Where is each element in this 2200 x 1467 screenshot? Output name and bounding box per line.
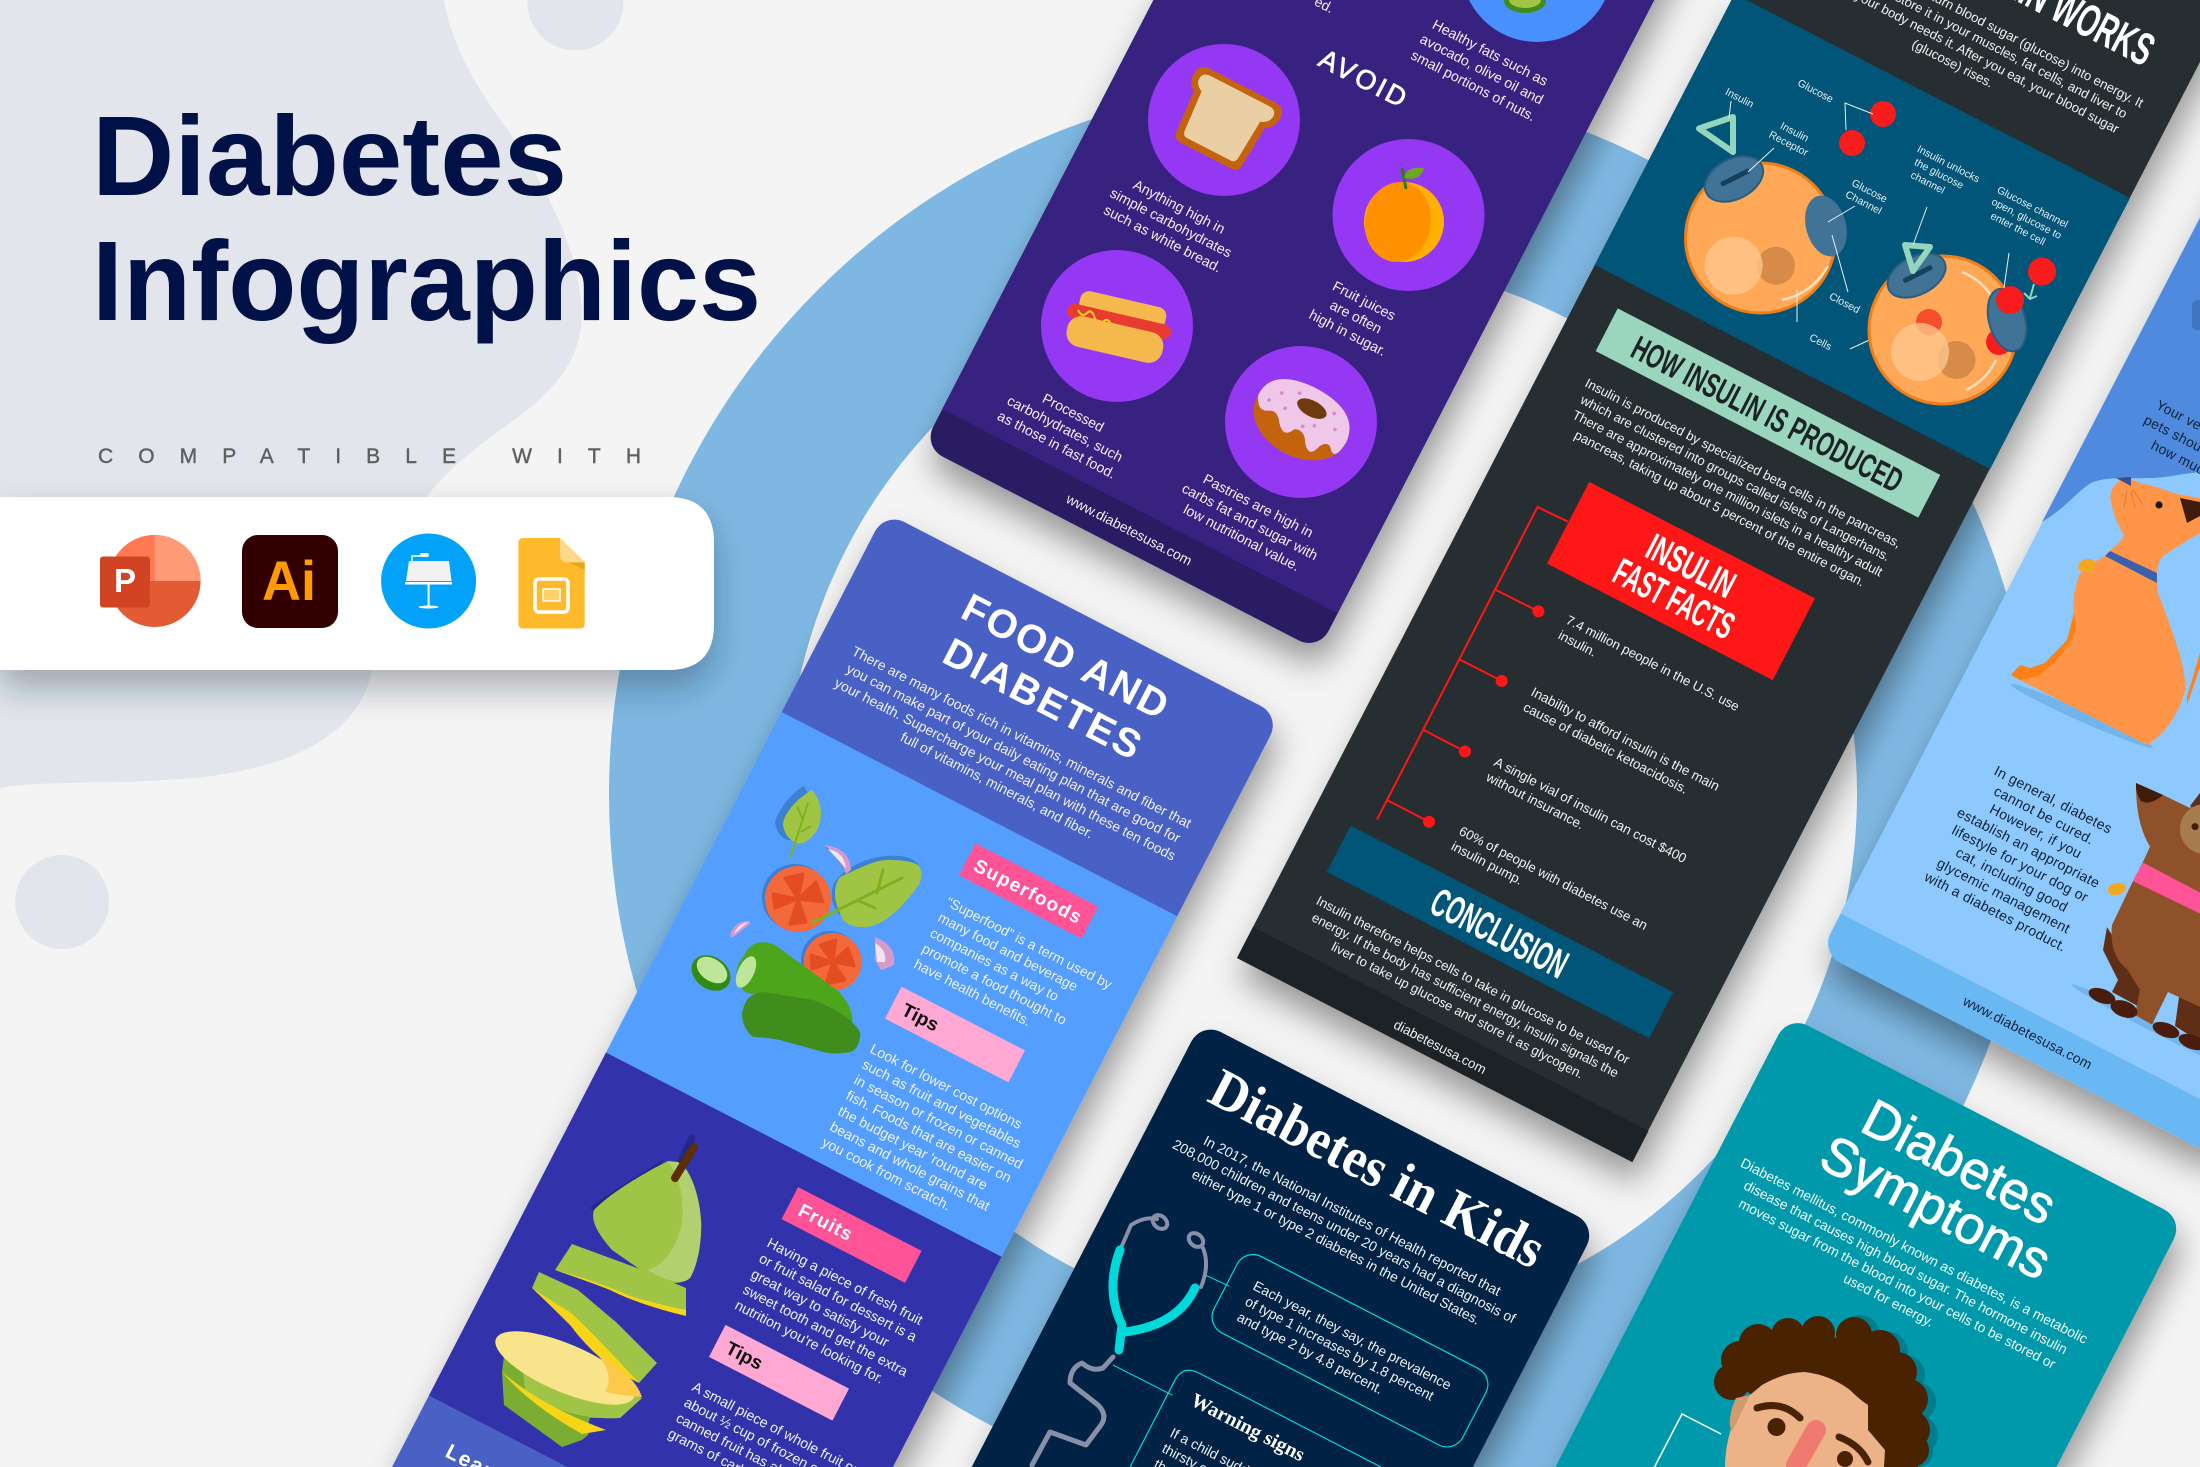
text: symptoms intro: moves sugar from the blood into your cells to be stored or — [1736, 1195, 2059, 1372]
text: processed carbs: as those in fast food. — [994, 408, 1118, 483]
text: food intro: you can make part of your daily eating plan that are good for — [844, 660, 1183, 846]
fast facts timeline — [1377, 507, 1568, 828]
fast fact 3: without insurance. — [1483, 769, 1587, 832]
illustration: cat — [2009, 477, 2200, 753]
text: bread: Anything high in — [1130, 177, 1227, 238]
heading box: insulin fast facts: INSULIN — [1639, 527, 1742, 607]
heading: avoid: AVOID — [1314, 43, 1414, 115]
cell labels: Receptor — [1767, 129, 1811, 159]
text: conclusion: liver to take up glucose and store it as glycogen. — [1329, 939, 1586, 1081]
text: fruits: sweet tooth and get the extra — [740, 1282, 910, 1380]
icon: Illustrator: Ai — [262, 549, 316, 612]
icon: avocado circle — [1461, 0, 1613, 42]
text: pastries: Pastries are high in — [1200, 471, 1315, 541]
cell labels: Glucose — [1796, 77, 1835, 106]
cell labels: Closed — [1827, 291, 1862, 316]
cell labels: Channel — [1843, 189, 1884, 217]
text: superfoods: many food and beverage — [936, 909, 1081, 994]
tag: tips 2 — [709, 1325, 849, 1421]
text: general diabetes advice: glycemic management — [1934, 855, 2073, 937]
text: tips: Look for lower cost options — [867, 1041, 1024, 1133]
cell labels: Cells — [1807, 332, 1833, 353]
heading: food and diabetes: DIABETES — [936, 630, 1150, 769]
heading: diabetes in kids: Diabetes in Kids — [1200, 1057, 1555, 1281]
fast fact 2: cause of diabetic ketoacidosis. — [1521, 699, 1690, 797]
heading band: conclusion: CONCLUSION — [1423, 880, 1575, 987]
text: superfoods: have health benefits. — [912, 956, 1034, 1029]
background circle left — [15, 855, 109, 949]
tag: fruits — [782, 1187, 922, 1283]
fast fact 4: insulin pump. — [1449, 838, 1525, 888]
tag: tips: Tips — [898, 1000, 942, 1036]
text: insulin intro: (glucose) rises. — [1910, 36, 1996, 90]
tag: superfoods: Superfoods — [970, 856, 1086, 929]
illustration: stethoscope — [1032, 1212, 1229, 1465]
fast fact 1: 7.4 million people in the U.S. use — [1564, 612, 1742, 714]
text: processed carbs: carbohydrates, such — [1004, 393, 1125, 466]
text: symptoms intro: used for energy. — [1841, 1270, 1937, 1330]
icon: small blob — [2192, 300, 2200, 330]
heading band: conclusion — [1327, 826, 1673, 1038]
text: general diabetes advice: establish an appropriate — [1954, 805, 2102, 892]
text: conclusion: Insulin therefore helps cells to take in glucose to be used for — [1314, 893, 1633, 1067]
text: bread: such as white bread. — [1101, 202, 1224, 276]
text: food intro: full of vitamins, minerals, and fiber. — [898, 729, 1096, 841]
background ring — [698, 170, 1946, 1418]
text: food intro: your health. Supercharge your meal plan with these ten foods — [832, 674, 1178, 864]
illustration: person with curly hair — [1654, 1315, 1938, 1467]
text: pastries: low nutritional value. — [1181, 502, 1302, 575]
callout: prevalence: of type 1 increases by 1.8 percent — [1243, 1293, 1437, 1404]
footer url: diabetesusa.com — [1391, 1017, 1489, 1077]
panel: foods to avoid card — [923, 0, 1731, 651]
text: tips: beans and whole grains that — [827, 1119, 992, 1215]
text: superfoods: companies as a way to — [928, 925, 1062, 1004]
heading: food and diabetes: FOOD AND — [955, 586, 1177, 729]
panel: diabetes in kids card — [972, 1022, 1597, 1467]
panel: diabetes symptoms card — [1555, 1016, 2184, 1467]
illustration: closed cell — [1686, 101, 1896, 349]
icon: Illustrator — [242, 535, 338, 628]
text: tips: the budget year 'round are — [835, 1104, 990, 1194]
text: pastries: carbs fat and sugar with — [1179, 481, 1320, 564]
title — [92, 93, 761, 344]
text: kids intro: In 2017, the National Institutes of Health reported that — [1201, 1132, 1504, 1299]
footer url: www.diabetesusa.com — [1063, 490, 1195, 569]
text: tips: you cook from scratch. — [819, 1135, 953, 1214]
text: tips: fish. Foods that are easier on — [843, 1088, 1014, 1186]
text: fruit juices: are often — [1327, 297, 1384, 337]
text: insulin production: pancreas, taking up about 5 percent of the entire organ. — [1572, 427, 1867, 589]
text: general diabetes advice: cat, including good — [1953, 845, 2070, 916]
icon: bread — [1148, 44, 1300, 196]
tag: tips — [885, 987, 1025, 1082]
text: general diabetes advice: In general, diabetes — [1991, 763, 2115, 838]
icon: donut — [1225, 346, 1377, 498]
fast fact 2: Inability to afford insulin is the main — [1529, 684, 1722, 794]
callout: prevalence: and type 2 by 4.8 percent. — [1235, 1309, 1386, 1397]
fast fact 1: insulin. — [1556, 627, 1599, 660]
text: general diabetes advice: with a diabetes product. — [1921, 869, 2068, 956]
icon: Keynote — [381, 534, 476, 628]
cell labels: Insulin — [1778, 120, 1811, 145]
text: tips: in season or frozen or canned — [851, 1072, 1025, 1173]
tag: fruits: Fruits — [795, 1200, 856, 1246]
text: conclusion: energy. If the body has sufficient energy, insulin signals the — [1309, 910, 1621, 1080]
title: Infographics — [92, 218, 761, 344]
panel: software icons — [0, 497, 714, 670]
cell labels: the glucose — [1912, 156, 1966, 192]
text: bread: simple carbohydrates — [1107, 185, 1234, 261]
cell labels — [1723, 77, 2070, 353]
heading: diabetes symptoms: Diabetes — [1853, 1088, 2066, 1237]
cell labels: Glucose — [1850, 177, 1889, 206]
text: insulin production: which are clustered into groups called islets of Langerhans. — [1577, 392, 1892, 564]
text: healthy fats: avocado, olive oil and — [1417, 31, 1546, 108]
heading: diabetes symptoms: Symptoms — [1811, 1124, 2060, 1291]
text: general diabetes advice: However, if you — [1987, 802, 2084, 862]
icon: PowerPoint: P — [114, 562, 136, 599]
callout: warning signs: Warning signs — [1187, 1389, 1309, 1466]
cell labels: Insulin — [1723, 86, 1756, 111]
icon: orange — [1332, 139, 1484, 291]
text: fruits: nutrition you're looking for. — [732, 1298, 886, 1388]
background blob — [0, 0, 582, 788]
callout: prevalence: Each year, they say, the prevalence — [1251, 1277, 1454, 1393]
callout: warning signs — [1130, 1370, 1381, 1467]
illustration: brown dog — [2070, 783, 2200, 1070]
text: healthy fats: small portions of nuts. — [1408, 48, 1538, 125]
heading band: how insulin is produced: HOW INSULIN IS PRODUCED — [1625, 329, 1909, 500]
dark blue wave — [2042, 218, 2200, 522]
tag: superfoods — [959, 843, 1098, 939]
text: general diabetes advice: cannot be cured. — [1991, 784, 2096, 848]
text: insulin production: Insulin is produced by specialized beta cells in the pancreas, — [1583, 375, 1903, 551]
heading box: insulin fast facts — [1547, 482, 1815, 680]
icon: hot dog — [1041, 250, 1193, 402]
text: healthy fats: Healthy fats such as — [1429, 17, 1550, 90]
text: fruits: or fruit salad for dessert is a — [756, 1251, 919, 1345]
compatible with label: COMPATIBLE WITH — [98, 445, 641, 468]
cell labels: open, glucose to — [1989, 196, 2064, 242]
text: superfoods: “Superfood” is a term used by — [944, 893, 1115, 992]
text: fruits: Having a piece of fresh fruit — [764, 1235, 925, 1329]
callout: prevalence — [1206, 1248, 1494, 1453]
icon: PowerPoint — [100, 535, 201, 627]
text: insulin production: There are approximately one million islets in a healthy adult — [1570, 407, 1885, 580]
icon: Google Slides — [518, 538, 585, 628]
panel: dog and cat card — [1820, 64, 2200, 1157]
illustration: vegetables — [685, 786, 921, 1054]
text: kids intro: either type 1 or type 2 diabetes in the United States. — [1189, 1166, 1483, 1328]
text: fruit juices: Fruit juices — [1330, 279, 1398, 324]
illustration: pear — [487, 1138, 701, 1447]
text: fruits: great way to satisfy your — [748, 1266, 892, 1351]
text: fruit juices: high in sugar. — [1306, 307, 1388, 360]
fast fact 3: A single vial of insulin can cost $400 — [1492, 754, 1689, 866]
cell labels: Insulin unlocks — [1915, 143, 1982, 185]
footer url: www.diabetesusa.com — [1960, 992, 2095, 1072]
cell labels: enter the cell — [1988, 210, 2047, 248]
cell labels: channel — [1908, 169, 1947, 197]
text: superfoods: promote a food thought to — [920, 940, 1070, 1028]
cell labels: Glucose channel — [1995, 184, 2070, 231]
text: food intro: There are many foods rich in vitamins, minerals and fiber that — [849, 643, 1194, 831]
panel: how insulin works card — [1237, 0, 2200, 1162]
title: Diabetes — [92, 93, 567, 219]
text: processed carbs: Processed — [1039, 391, 1106, 436]
text: tips: such as fruit and vegetables — [859, 1057, 1023, 1152]
panel: food and diabetes card — [392, 512, 1280, 1467]
heading box: insulin fast facts: FAST FACTS — [1606, 551, 1741, 648]
text: symptoms intro: Diabetes mellitus, commonly known as diabetes, is a metabolic — [1738, 1154, 2091, 1347]
illustration: open cell — [1869, 207, 2056, 404]
text: kids intro: 208,000 children and teens under 20 years had a diagnosis of — [1170, 1136, 1519, 1326]
text: general diabetes advice: lifestyle for your dog or — [1949, 823, 2091, 906]
heading band: how insulin is produced — [1596, 308, 1940, 518]
tag: tips 2: Tips — [722, 1338, 766, 1375]
text: symptoms intro: disease that causes high blood sugar. The hormone insulin — [1741, 1177, 2070, 1357]
background circle top — [528, 0, 624, 50]
fast fact 4: 60% of people with diabetes use an — [1457, 823, 1650, 933]
